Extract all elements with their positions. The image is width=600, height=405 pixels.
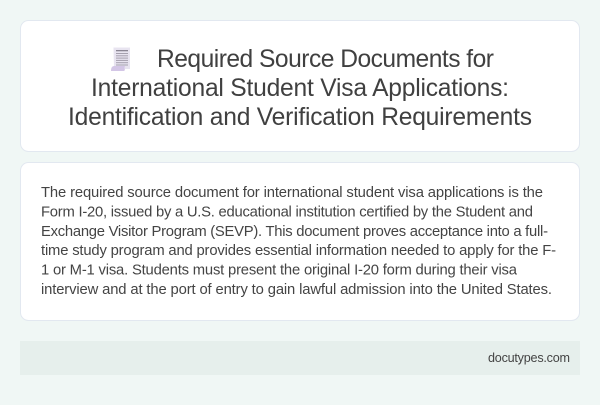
text block: description: Form I-20, issued by a U.S. educational institution certified by the Student and (41, 204, 533, 220)
text block: description: Exchange Visitor Program (SEVP). This document proves acceptance into a full- (41, 224, 548, 240)
panel: body card (20, 162, 580, 320)
panel: header card (20, 20, 580, 152)
title: International Student Visa Applications: (91, 75, 509, 102)
footer bar (20, 341, 580, 375)
title: Required Source Documents for (157, 46, 494, 73)
text block: description: The required source document for international student visa applications is the (41, 185, 543, 201)
footer source label: docutypes.com (488, 351, 570, 365)
text block: description: 1 or M-1 visa. Students must present the original I-20 form during their visa (41, 263, 518, 279)
title (68, 46, 532, 131)
icon: document scroll (111, 48, 130, 71)
text block: description (41, 185, 556, 298)
title: Identification and Verification Requirements (68, 104, 532, 131)
text block: description: interview and at the port of entry to gain lawful admission into the United States. (41, 282, 552, 298)
text block: description: time study program and provides essential information needed to apply for the F- (41, 243, 556, 259)
